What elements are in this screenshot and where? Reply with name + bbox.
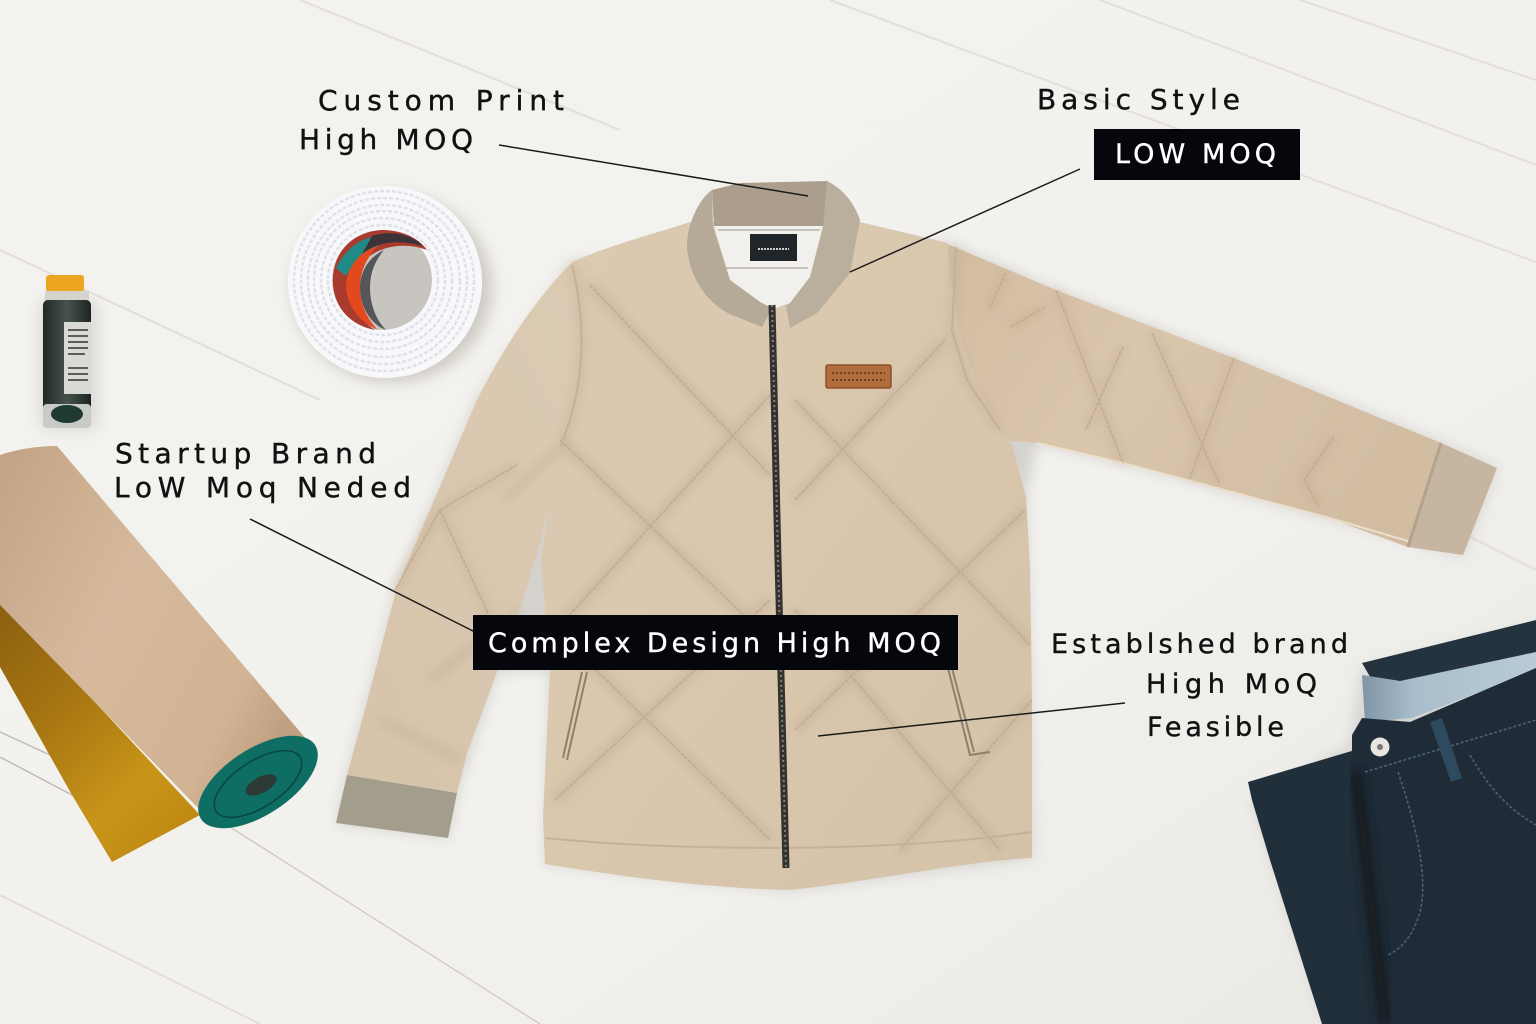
left cuff xyxy=(336,775,457,838)
leather chest patch xyxy=(826,365,891,388)
trouser front xyxy=(1352,668,1536,1024)
callout: Startup Brand xyxy=(114,437,411,504)
jacket shadow xyxy=(336,243,1497,890)
zipper xyxy=(772,305,786,868)
callout: Basic Style: Basic Style xyxy=(1037,83,1240,116)
callout: Custom Print: High MOQ xyxy=(299,123,473,156)
ribbed collar xyxy=(687,190,772,327)
collar back band xyxy=(712,181,828,228)
jacket body xyxy=(541,222,1032,890)
belt loop xyxy=(1430,718,1462,782)
quilting seams xyxy=(395,273,1334,850)
callout leader lines xyxy=(250,145,1125,736)
button xyxy=(1370,738,1390,756)
collar interior xyxy=(714,226,823,310)
jacket xyxy=(336,181,1497,890)
icon: navy trousers xyxy=(1248,620,1536,1024)
callout: Complex Design xyxy=(473,615,958,670)
trouser leg xyxy=(1248,750,1400,1024)
callout: Established brand: Establshed brand xyxy=(1051,629,1348,660)
callout: Established brand: High MoQ xyxy=(1146,669,1317,700)
left sleeve xyxy=(347,262,600,793)
pockets xyxy=(563,668,990,760)
icon: bottle with orange cap xyxy=(40,275,98,430)
icon: kraft paper roll with gold sheet xyxy=(0,446,333,862)
quilting puff shading xyxy=(545,285,1032,850)
callout: Basic Style xyxy=(1037,83,1300,180)
trouser lining xyxy=(1362,652,1536,722)
armhole and hem seams xyxy=(546,247,1031,848)
callout: Established brand: Feasible xyxy=(1147,712,1284,743)
callout: Basic Style: LOW MOQ xyxy=(1115,139,1276,170)
callout: Custom Print: Custom Print xyxy=(318,84,564,117)
callout: Custom Print xyxy=(299,84,564,156)
trouser waistband back xyxy=(1362,620,1536,682)
icon: white ribbon roll xyxy=(288,186,492,382)
callout: Startup Brand: Startup Brand xyxy=(115,437,376,470)
callout: Established brand xyxy=(1051,629,1348,743)
neck label xyxy=(750,234,797,261)
callout: Startup Brand: LoW Moq Neded xyxy=(114,471,411,504)
right sleeve xyxy=(945,243,1441,547)
callout: Complex Design: Complex Design High MOQ xyxy=(488,628,941,659)
right cuff xyxy=(1408,443,1497,555)
